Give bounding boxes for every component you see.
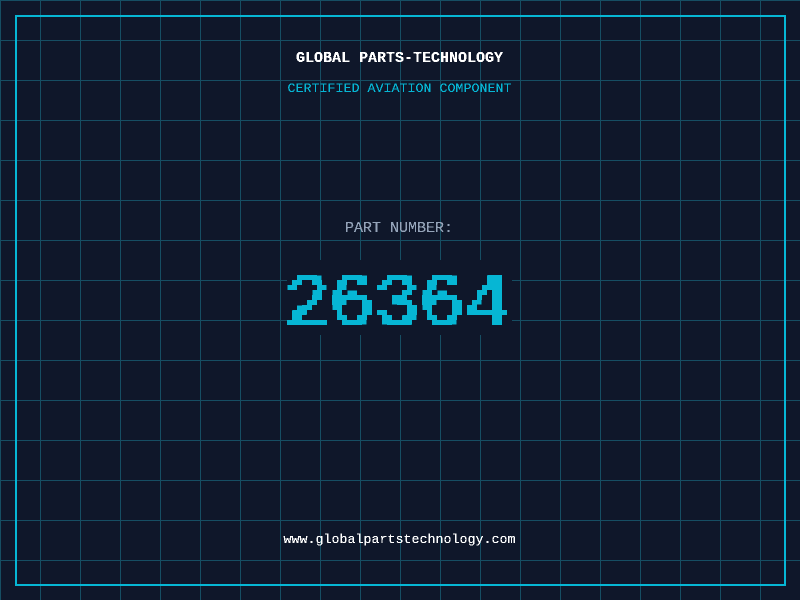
- subtitle: CERTIFIED AVIATION COMPONENT: [288, 82, 511, 97]
- website url: www.globalpartstechnology.com: [284, 533, 515, 548]
- part number label: PART NUMBER:: [345, 220, 453, 237]
- part number value: 26364: [284, 263, 510, 348]
- title: GLOBAL PARTS-TECHNOLOGY: [296, 50, 503, 67]
- part number panel: [284, 260, 512, 348]
